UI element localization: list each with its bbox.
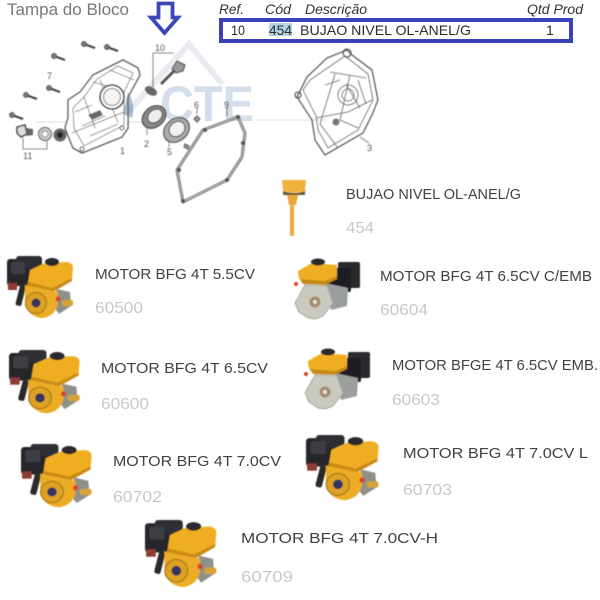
product: motor 60709 <box>145 520 438 587</box>
part 3: engine block cover <box>295 49 378 155</box>
highlighted table row <box>221 20 571 41</box>
motor image <box>145 520 216 587</box>
product: motor 60703 <box>306 435 588 500</box>
highlighted table row: 10 <box>231 22 245 38</box>
motor image <box>304 348 370 409</box>
highlighted table row: 1 <box>546 22 554 38</box>
part 2: oil seal <box>138 101 170 135</box>
watermark: ACTE logo: CTE <box>160 76 254 132</box>
motor name: MOTOR BFG 4T 7.0CV <box>113 453 281 470</box>
part 11: drain plug and washer <box>17 125 66 149</box>
motor name: MOTOR BFGE 4T 6.5CV EMB. <box>392 357 598 374</box>
table header: Qtd Prod <box>527 1 584 17</box>
product: motor 60702 <box>21 444 281 507</box>
motor code: 60604 <box>380 302 428 319</box>
heading: Tampa do Bloco: Tampa do Bloco <box>7 0 129 19</box>
product: motor 60603 <box>304 348 598 409</box>
product: motor 60500 <box>7 256 255 318</box>
part 10: oil plug <box>143 53 185 98</box>
part code: 454 <box>346 220 374 237</box>
icon: down arrow pointing at part <box>151 4 178 33</box>
motor name: MOTOR BFG 4T 5.5CV <box>95 266 255 283</box>
part numbers: 3 <box>367 143 372 153</box>
motor code: 60703 <box>403 482 452 499</box>
highlighted table row: 454 <box>269 22 292 38</box>
part 5: bearing <box>159 113 194 147</box>
part numbers <box>23 43 372 161</box>
exploded parts diagram <box>9 41 378 203</box>
highlighted table row: BUJAO NIVEL OL-ANEL/G <box>300 22 471 38</box>
motor image <box>9 350 80 413</box>
motor code: 60709 <box>241 569 293 586</box>
part name: BUJAO NIVEL OL-ANEL/G <box>346 186 521 203</box>
icon: yellow oil dipstick <box>282 180 306 236</box>
product: motor 60604 <box>294 258 592 319</box>
part 9: gasket <box>177 108 245 203</box>
motor name: MOTOR BFG 4T 7.0CV L <box>403 445 588 462</box>
part numbers: 9 <box>224 100 229 110</box>
motor image <box>294 258 360 319</box>
motor image <box>21 444 92 507</box>
motor image <box>306 435 379 500</box>
motor name: MOTOR BFG 4T 6.5CV <box>101 360 268 377</box>
table header: Ref. <box>219 1 244 17</box>
part numbers: 5 <box>167 147 172 157</box>
part numbers: 1 <box>120 146 125 156</box>
part numbers: 7 <box>47 71 52 81</box>
motor code: 60500 <box>95 300 143 317</box>
motor code: 60702 <box>113 489 162 506</box>
part numbers: 6 <box>194 100 199 110</box>
product: motor 60600 <box>9 350 268 413</box>
part numbers: 2 <box>144 139 149 149</box>
part 1: crankcase cover <box>65 60 140 153</box>
motor code: 60600 <box>101 396 149 413</box>
part numbers: 10 <box>155 43 165 53</box>
motor name: MOTOR BFG 4T 7.0CV-H <box>241 530 438 547</box>
motor name: MOTOR BFG 4T 6.5CV C/EMB <box>380 268 592 285</box>
table header: Descrição <box>305 1 367 17</box>
parts table <box>219 1 584 41</box>
motor code: 60603 <box>392 392 440 409</box>
table header: Cód <box>265 1 292 17</box>
part: oil plug photo and label <box>282 180 521 237</box>
part 6: dowel pins <box>184 108 200 149</box>
bolts: part 7 <box>9 41 118 119</box>
table header <box>219 1 584 17</box>
watermark: ACTE logo <box>35 44 325 132</box>
part numbers: 11 <box>23 151 32 161</box>
motor image <box>7 256 73 318</box>
